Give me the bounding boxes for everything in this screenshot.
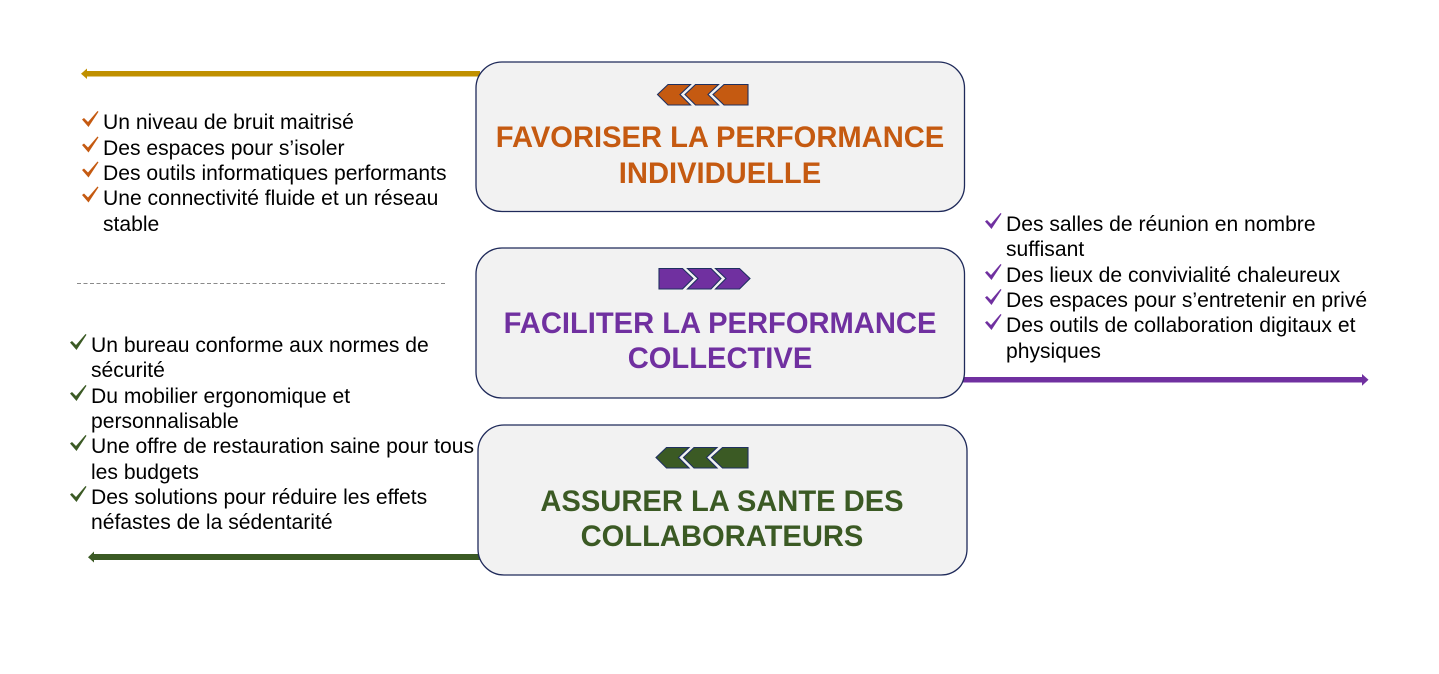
icon: purple chevrons pointing right: [659, 268, 750, 289]
heading: FACILITER LA PERFORMANCE: [504, 308, 936, 340]
item: safety standards: Un bureau conforme aux normes de: [91, 334, 429, 357]
heading: INDIVIDUELLE: [619, 158, 821, 190]
item: collaboration tools: Des outils de collaboration digitaux et: [1006, 314, 1356, 337]
heading: ASSURER LA SANTE DES: [540, 486, 904, 518]
icon: orange chevrons pointing left: [658, 84, 748, 105]
item: collaboration tools: physiques: [1006, 340, 1101, 363]
item: ergonomic furniture: Du mobilier ergonomique et: [91, 385, 350, 408]
item: private spaces: Des espaces pour s’entretenir en privé: [1006, 289, 1367, 312]
panel: collective performance: [476, 248, 964, 398]
checklist: individual performance: [82, 111, 447, 236]
item: IT tools: Des outils informatiques performants: [103, 162, 447, 185]
heading: COLLECTIVE: [628, 343, 812, 375]
item: connectivity: Une connectivité fluide et un réseau: [103, 187, 438, 210]
item: safety standards: sécurité: [91, 359, 165, 382]
item: catering: [70, 435, 474, 484]
item: sedentary solutions: Des solutions pour réduire les effets: [91, 486, 427, 509]
arrow: green, pointing left: [88, 552, 484, 562]
item: catering: les budgets: [91, 461, 199, 484]
item: catering: Une offre de restauration saine pour tous: [91, 435, 474, 458]
panel: individual performance: [476, 62, 964, 212]
item: ergonomic furniture: personnalisable: [91, 410, 239, 433]
item: meeting rooms: Des salles de réunion en nombre: [1006, 213, 1316, 236]
heading: COLLABORATEURS: [581, 521, 863, 553]
item: collaboration tools: [985, 314, 1356, 363]
item: connectivity: stable: [103, 213, 159, 236]
heading: FAVORISER LA PERFORMANCE: [496, 122, 944, 154]
item: sedentary solutions: [70, 486, 427, 534]
checklist: collective performance: [985, 213, 1367, 363]
divider: [77, 282, 447, 284]
item: connectivity: [82, 186, 438, 236]
item: meeting rooms: suffisant: [1006, 238, 1084, 261]
item: social spaces: Des lieux de convivialité chaleureux: [1006, 264, 1341, 287]
item: sedentary solutions: néfastes de la sédentarité: [91, 511, 333, 534]
icon: green chevrons pointing left: [656, 448, 748, 468]
arrow: purple, pointing right: [960, 374, 1368, 386]
item: ergonomic furniture: [70, 385, 350, 433]
item: safety standards: [70, 334, 429, 382]
checklist: health: [70, 334, 474, 534]
arrow: gold, pointing left: [81, 68, 480, 79]
item: noise: Un niveau de bruit maitrisé: [103, 111, 354, 134]
item: meeting rooms: [985, 213, 1316, 261]
item: isolation: Des espaces pour s’isoler: [103, 137, 345, 160]
panel: employee health: [478, 425, 967, 575]
